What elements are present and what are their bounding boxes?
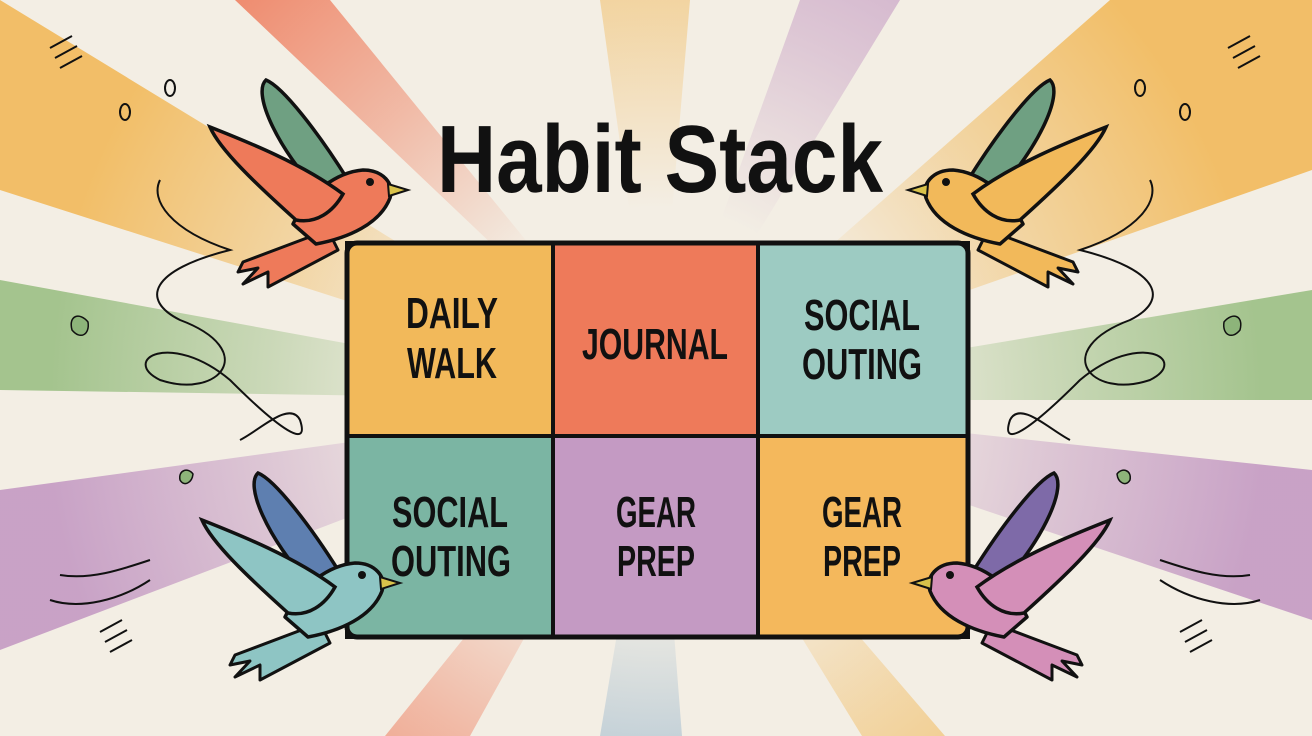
cell: social outing top [758,243,968,436]
cell: social outing top: SOCIAL [804,291,920,340]
bird: red top-left [210,80,408,287]
cell: gear prep right: PREP [823,537,901,586]
cell: gear prep right [758,436,968,637]
habit grid [347,243,968,637]
title: Habit Stack [437,106,884,213]
cell: gear prep middle [553,436,758,637]
leaves [71,316,1241,484]
cell: daily walk: WALK [407,339,497,388]
decorative swirls [50,36,1260,652]
cell: social outing top: OUTING [802,340,922,389]
bird: blue bottom-left [202,473,400,680]
cell: gear prep middle: GEAR [616,488,696,537]
cell: gear prep right: GEAR [822,488,902,537]
cell: social outing bottom: OUTING [391,537,511,586]
bird: pink bottom-right [912,473,1110,680]
cell: social outing bottom [347,436,553,637]
cell: social outing bottom: SOCIAL [392,488,508,537]
bird: yellow top-right [908,80,1106,287]
cell: journal: JOURNAL [582,320,728,369]
cell: daily walk [347,243,553,436]
cell: journal [553,243,758,436]
cell: gear prep middle: PREP [617,537,695,586]
cell: daily walk: DAILY [406,289,498,338]
